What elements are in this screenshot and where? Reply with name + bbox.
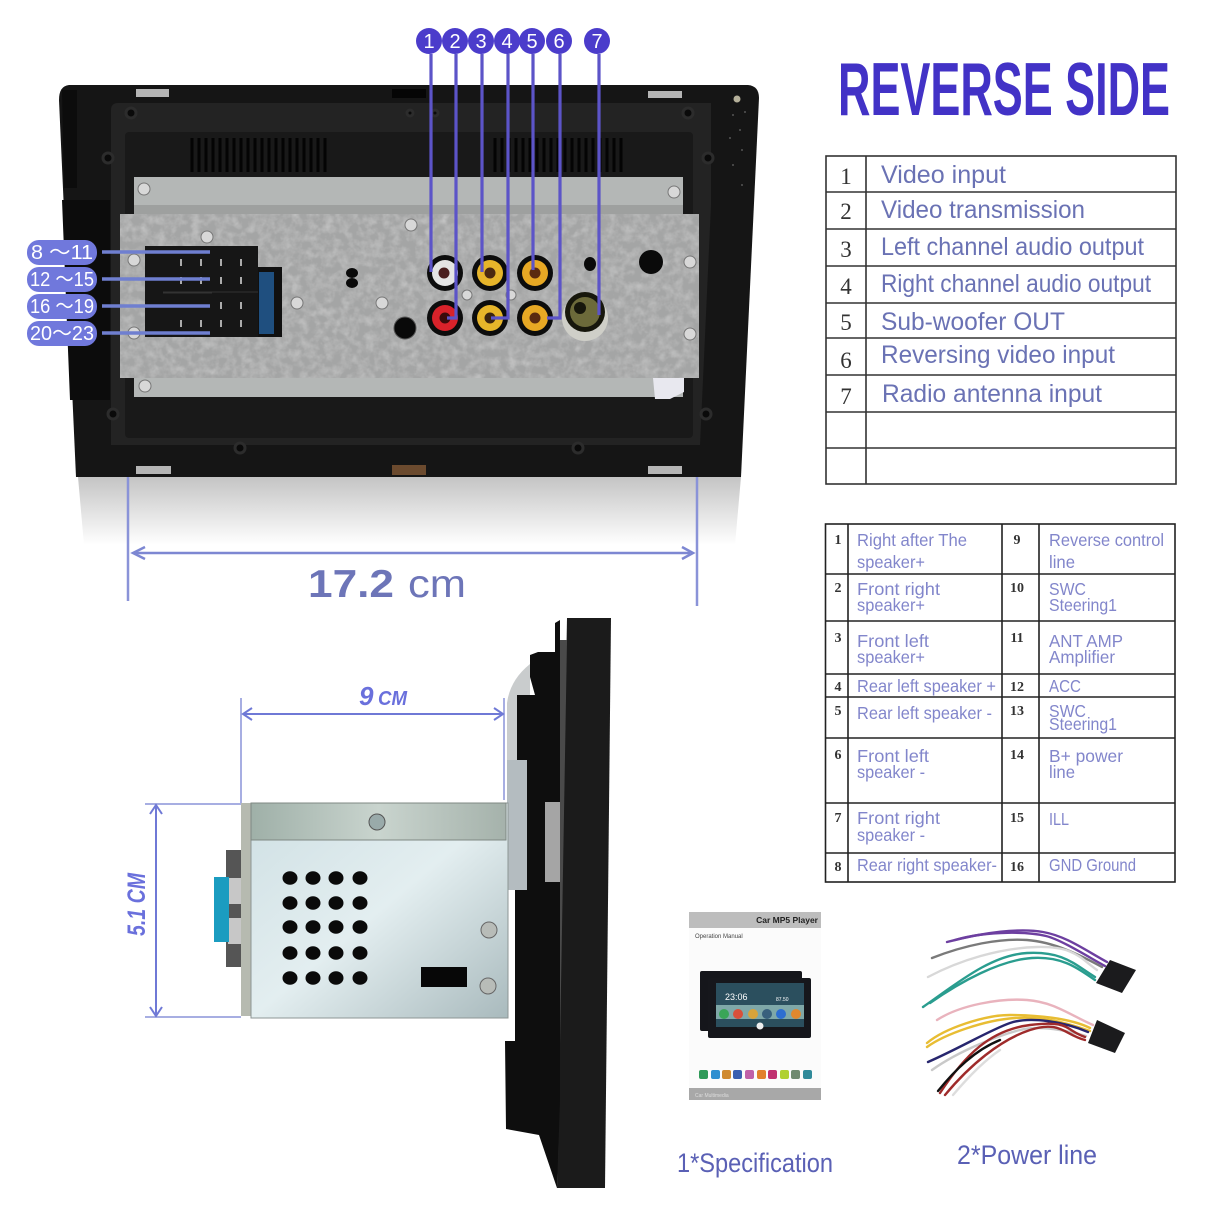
table: reverse side ports <box>826 156 1176 484</box>
upper plug <box>1096 960 1136 993</box>
left side recess <box>62 90 110 400</box>
width dimension: 17.2 cm: 17.2 <box>308 563 394 606</box>
callout lines and numbers 1 to 7: 5 <box>526 31 538 53</box>
feature icons row <box>699 1070 812 1079</box>
width dimension: 17.2 cm: cm <box>408 563 466 606</box>
callout lines and numbers 1 to 7: 4 <box>501 31 513 53</box>
top screw <box>369 814 385 830</box>
callout lines and numbers 1 to 7: 3 <box>475 31 487 53</box>
lower plug <box>1088 1020 1125 1053</box>
table: reverse side ports: 7 <box>840 384 852 409</box>
callout lines and numbers 1 to 7: 2 <box>449 31 461 53</box>
table: wiring pinout: 11 <box>1010 631 1024 646</box>
pill backgrounds <box>27 240 97 346</box>
flange <box>241 803 251 1016</box>
top and bottom clips <box>136 89 682 474</box>
table: wiring pinout: 6 <box>834 748 842 763</box>
mounting bosses <box>103 108 713 453</box>
manual booklet image: Car MP5 Player <box>756 915 819 925</box>
table: reverse side ports: Left channel audio output <box>881 233 1144 261</box>
table: wiring pinout: Front left <box>857 746 929 766</box>
callout lines and numbers 1 to 7: 1 <box>423 31 435 53</box>
grid <box>826 156 1176 484</box>
audio jack <box>394 317 416 339</box>
rear metal tray <box>134 177 683 397</box>
callout pills 8 to 23 <box>27 240 210 346</box>
table: wiring pinout: 5 <box>834 704 842 719</box>
manual booklet image: 87.50 <box>776 997 789 1003</box>
manual booklet image: Car Multimedia <box>695 1093 729 1099</box>
table: wiring pinout: Rear left speaker + <box>857 676 996 696</box>
table: reverse side ports: 6 <box>840 348 852 373</box>
table: reverse side ports: Radio antenna input <box>882 380 1102 408</box>
table: wiring pinout: 2 <box>834 581 842 596</box>
manual booklet image: Operation Manual <box>695 934 743 940</box>
table: wiring pinout: 4 <box>834 680 842 695</box>
table: reverse side ports: 4 <box>840 274 852 299</box>
table: wiring pinout: Steering1 <box>1049 714 1117 734</box>
manual booklet image <box>689 912 821 1100</box>
width dimension: 17.2 cm <box>128 477 697 606</box>
reflection under the unit <box>78 477 741 545</box>
table: wiring pinout: 7 <box>834 811 842 826</box>
table: wiring pinout: Amplifier <box>1049 647 1115 667</box>
main metal plate <box>120 214 699 378</box>
side screws <box>480 922 497 994</box>
table: wiring pinout: ILL <box>1049 809 1069 829</box>
table: wiring pinout: B+ power <box>1049 746 1123 766</box>
lower harness wires <box>927 1000 1093 1095</box>
metal box <box>251 803 508 1018</box>
table: wiring pinout: line <box>1049 552 1075 572</box>
grid <box>825 524 1175 882</box>
holes in the plate <box>346 250 663 288</box>
number badges <box>416 28 610 54</box>
table: wiring pinout: speaker+ <box>857 647 925 667</box>
radio antenna socket <box>562 292 608 341</box>
table: wiring pinout: 12 <box>1010 680 1024 695</box>
rectangular slot <box>421 967 467 987</box>
product photo: reverse side of the head unit <box>59 85 759 545</box>
table: reverse side ports: 3 <box>840 237 852 262</box>
dimension: height 5.1 cm: 5.1 СМ <box>123 872 151 936</box>
table: wiring pinout: 15 <box>1010 811 1024 826</box>
box top band <box>251 803 506 840</box>
table: reverse side ports: 5 <box>840 310 852 335</box>
product photo: side view <box>214 618 611 1188</box>
table: wiring pinout: speaker+ <box>857 552 925 572</box>
table: wiring pinout: 14 <box>1010 748 1024 763</box>
table: wiring pinout: ANT AMP <box>1049 631 1123 651</box>
table: wiring pinout <box>825 524 1175 882</box>
callout lines and numbers 1 to 7: 7 <box>591 31 603 53</box>
outer black housing <box>59 85 759 477</box>
wiring connector block <box>145 246 282 337</box>
table: wiring pinout: speaker - <box>857 825 925 845</box>
table: wiring pinout: ACC <box>1049 676 1081 696</box>
pill leader lines <box>102 252 210 333</box>
ribbon cable <box>545 802 560 882</box>
callout lines and numbers 1 to 7: 6 <box>553 31 565 53</box>
table: wiring pinout: 13 <box>1010 704 1024 719</box>
table: wiring pinout: Front right <box>857 579 940 599</box>
ventilation slots <box>192 138 621 172</box>
table: wiring pinout: speaker+ <box>857 595 925 615</box>
table: wiring pinout: 10 <box>1010 581 1024 596</box>
table: reverse side ports: Video transmission <box>881 196 1085 224</box>
dimension: depth 9 cm: 9 <box>359 681 374 711</box>
RCA sockets <box>427 255 553 336</box>
table: reverse side ports: Video input <box>881 161 1006 189</box>
table: wiring pinout: 16 <box>1010 860 1024 875</box>
table: wiring pinout: 9 <box>1014 533 1020 548</box>
callout pills 8 to 23: 20～23 <box>30 323 94 345</box>
table: wiring pinout: Steering1 <box>1049 595 1117 615</box>
table: wiring pinout: SWC <box>1049 579 1086 599</box>
screen <box>716 983 804 1027</box>
table: wiring pinout: 8 <box>834 860 842 875</box>
front head unit <box>708 978 811 1038</box>
table: wiring pinout: Right after The <box>857 530 967 550</box>
table: wiring pinout: line <box>1049 762 1075 782</box>
table: reverse side ports: Reversing video input <box>881 341 1115 369</box>
callout lines and numbers 1 to 7 <box>416 28 610 318</box>
manual booklet image: 23:06 <box>725 992 748 1002</box>
table: wiring pinout: 1 <box>834 533 842 548</box>
table: reverse side ports: Right channel audio output <box>881 270 1151 298</box>
table: reverse side ports: 2 <box>840 199 852 224</box>
caption: power line: 2*Power line <box>957 1140 1097 1170</box>
upper harness wires <box>923 930 1107 1007</box>
table: wiring pinout: Rear left speaker - <box>857 703 992 723</box>
table: wiring pinout: Reverse control <box>1049 530 1164 550</box>
screws <box>128 183 696 392</box>
inner panel <box>111 103 711 445</box>
leader lines <box>431 54 599 318</box>
wiring harness image <box>923 930 1136 1095</box>
table: wiring pinout: GND Ground <box>1049 855 1136 875</box>
dimension: height 5.1 cm <box>123 804 241 1017</box>
callout pills 8 to 23: 8 ～11 <box>31 242 93 264</box>
table: wiring pinout: speaker - <box>857 762 925 782</box>
front bezel <box>557 618 611 1188</box>
table: wiring pinout: Front right <box>857 808 940 828</box>
dimension: depth 9 cm <box>241 681 504 803</box>
callout pills 8 to 23: 12 ～15 <box>30 269 94 291</box>
right side speaker dots and screw <box>729 96 746 186</box>
ventilation holes <box>282 871 368 985</box>
back head unit <box>700 971 802 1031</box>
screen app icons <box>719 1009 801 1019</box>
rear upper silver housing <box>507 664 530 760</box>
table: wiring pinout: 3 <box>834 631 842 646</box>
header band <box>689 912 821 928</box>
footer band <box>689 1088 821 1100</box>
silver edge strip <box>552 640 567 1160</box>
rear connector <box>214 850 242 967</box>
caption: specification: 1*Specification <box>677 1148 833 1178</box>
table: wiring pinout: Front left <box>857 631 929 651</box>
table: wiring pinout: Rear right speaker- <box>857 855 997 875</box>
table: reverse side ports: Sub-woofer OUT <box>881 308 1065 336</box>
silver mount plate <box>507 760 527 890</box>
callout pills 8 to 23: 16 ～19 <box>30 296 94 318</box>
dimension: depth 9 cm: СМ <box>378 688 408 710</box>
table: wiring pinout: SWC <box>1049 701 1086 721</box>
rear body black parts <box>505 620 560 1188</box>
table: reverse side ports: 1 <box>840 164 852 189</box>
